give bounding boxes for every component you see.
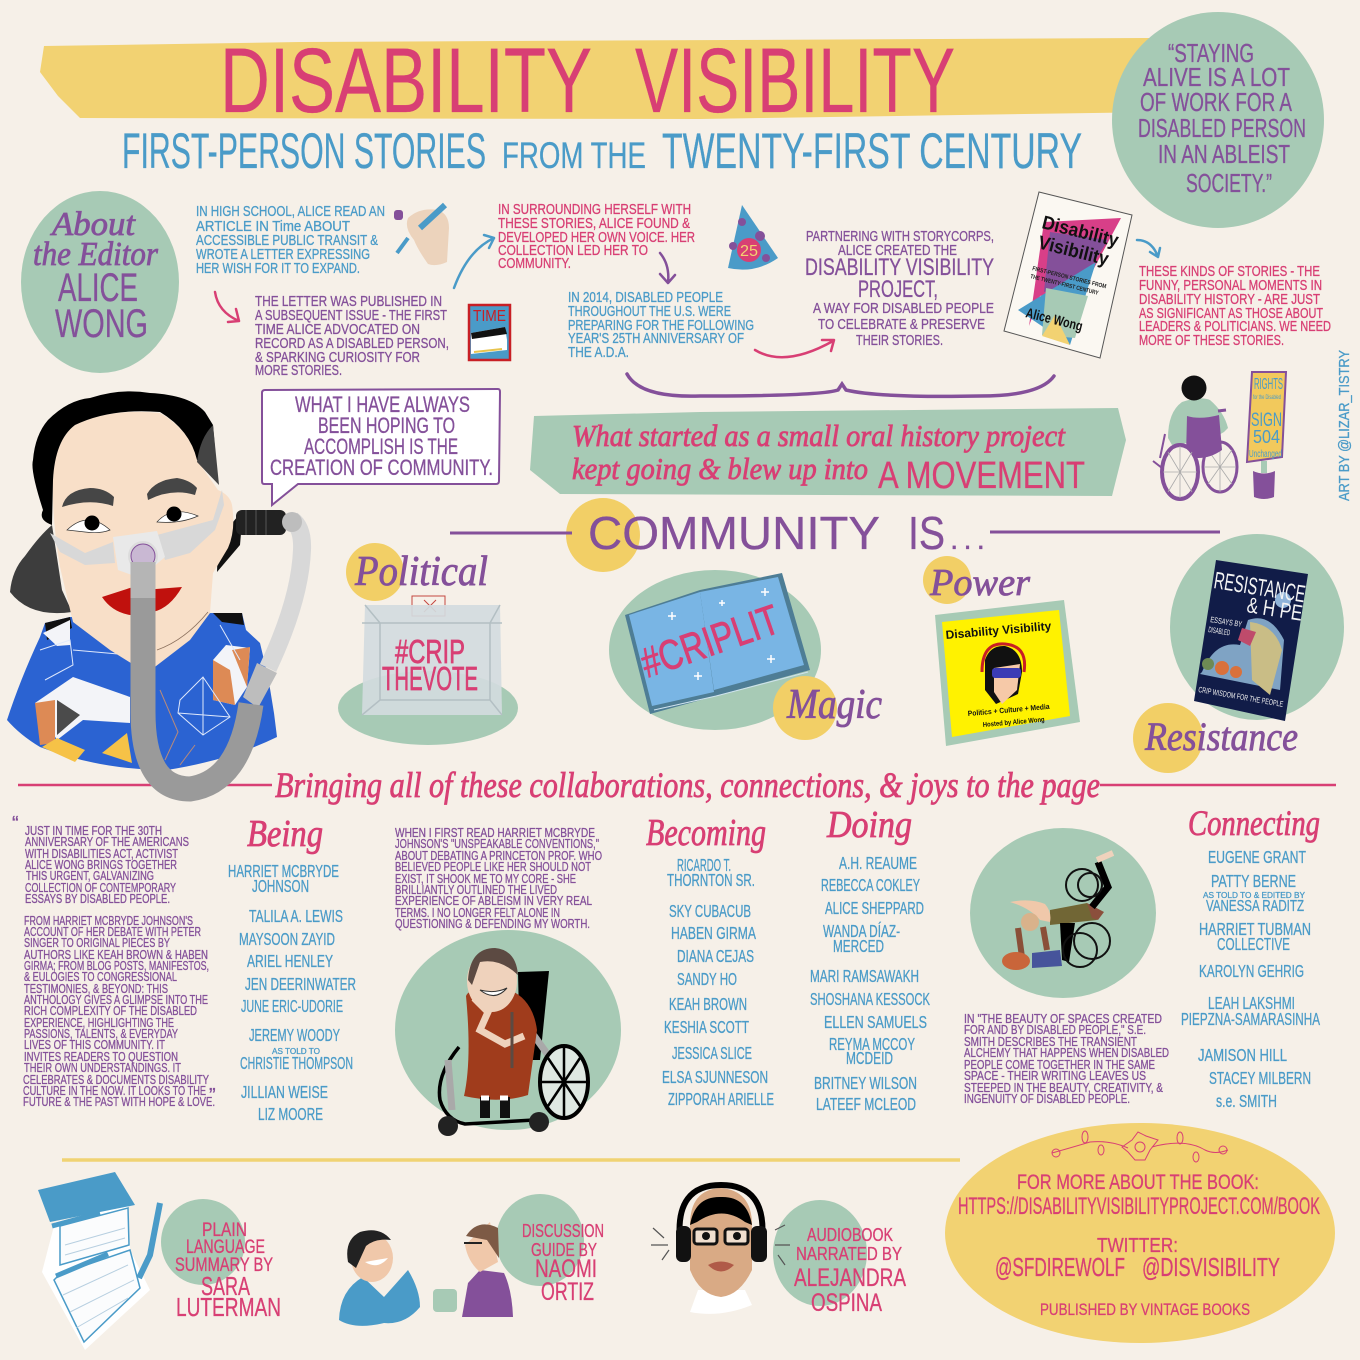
title	[220, 30, 955, 132]
discussion guide: DISCUSSION	[522, 1221, 604, 1241]
quote: Harriet McBryde Johnson essay: WHEN I FIRST READ HARRIET MCBRYDE	[395, 826, 595, 840]
resistance: book: CRIP WISDOM FOR THE PEOPLE	[1198, 685, 1284, 709]
quote: Harriet McBryde Johnson essay: JOHNSON'S "UNSPEAKABLE CONVENTIONS,"	[395, 837, 599, 851]
political: ballot box: Political	[354, 549, 488, 595]
speech bubble	[262, 389, 500, 505]
icon: party hat	[728, 205, 778, 270]
book description: JUST IN TIME FOR THE 30TH	[25, 824, 162, 838]
quote: Harriet McBryde Johnson essay: ABOUT DEBATING A PRINCETON PROF. WHO	[395, 849, 602, 863]
plain language summary	[38, 1172, 281, 1350]
wheelchair activist with sign	[1153, 372, 1286, 499]
story block: 2014: PREPARING FOR THE FOLLOWING	[568, 318, 754, 334]
column: connecting: Connecting	[1188, 803, 1320, 843]
icon: time magazine cover	[469, 305, 510, 360]
icon: hand writing	[394, 205, 449, 265]
movement banner	[530, 408, 1126, 497]
quote circle: “STAYING	[1168, 38, 1254, 68]
story block: surrounding herself: COMMUNITY.	[498, 256, 571, 272]
story block: high school letter: ARTICLE IN Time ABOUT	[196, 219, 350, 235]
power: podcast poster: Hosted by Alice Wong	[983, 717, 1045, 729]
illustration: Harriet in wheelchair	[395, 930, 621, 1136]
discussion guide	[339, 1194, 604, 1326]
book description: INVITES READERS TO QUESTION	[24, 1050, 178, 1064]
column: being: JEN DEERINWATER	[245, 974, 356, 994]
column: becoming: DIANA CEJAS	[677, 946, 754, 966]
book description: AUTHORS LIKE KEAH BROWN & HABEN	[24, 948, 208, 962]
book description: ACCOUNT OF HER DEBATE WITH PETER	[24, 925, 201, 939]
portrait: Alice Wong	[7, 391, 302, 770]
text: beauty of spaces: ALCHEMY THAT HAPPENS WHEN DISABLED	[964, 1046, 1169, 1060]
story block: these kinds of stories	[1139, 264, 1331, 349]
plain language summary: SARA	[201, 1271, 250, 1301]
quote: Harriet McBryde Johnson essay	[395, 826, 602, 931]
text: beauty of spaces: FOR AND BY DISABLED PEOPLE," S.E.	[964, 1023, 1146, 1037]
book description: ALICE WONG BRINGS TOGETHER	[25, 858, 177, 872]
audiobook: OSPINA	[811, 1289, 882, 1317]
arrow: to project	[755, 340, 834, 357]
column: becoming: ELSA SJUNNESON	[662, 1067, 768, 1087]
text: beauty of spaces: SMITH DESCRIBES THE TRANSIENT	[964, 1035, 1137, 1049]
book description: “	[12, 813, 19, 835]
story block: letter published: THE LETTER WAS PUBLISHED IN	[255, 294, 442, 310]
column: doing: A.H. REAUME	[839, 853, 917, 873]
story block: 2014: THE A.D.A.	[568, 345, 629, 361]
plain language summary: LANGUAGE	[186, 1237, 265, 1258]
arrow: down to 2014	[660, 253, 675, 283]
column: doing	[810, 804, 930, 1114]
column: doing: REBECCA COKLEY	[821, 875, 920, 895]
story block: storycorps	[805, 229, 994, 349]
political: ballot box	[338, 543, 518, 745]
column: doing: BRITNEY WILSON	[814, 1073, 917, 1093]
column: doing: LATEEF MCLEOD	[816, 1094, 916, 1114]
art credit: ART BY @LIZAR_TISTRY	[1336, 350, 1353, 501]
quote: Harriet McBryde Johnson essay: TERMS. I NO LONGER FELT ALONE IN	[395, 906, 560, 920]
column: becoming: ZIPPORAH ARIELLE	[668, 1089, 774, 1109]
story block: high school letter	[196, 204, 385, 277]
more info oval: TWITTER:	[1097, 1235, 1178, 1257]
heading: community is: IS	[908, 507, 945, 559]
more info oval: PUBLISHED BY VINTAGE BOOKS	[1040, 1300, 1250, 1319]
book description: TESTIMONIES, & BEYOND: THIS	[24, 982, 168, 996]
more info oval: @DISVISIBILITY	[1142, 1252, 1280, 1282]
heading: community is: ...	[950, 523, 985, 556]
column: being: MAYSOON ZAYID	[239, 929, 335, 949]
plain language summary: LUTERMAN	[176, 1292, 281, 1322]
wheelchair activist with sign: 504	[1253, 427, 1280, 447]
column: connecting: PATTY BERNE	[1211, 871, 1296, 891]
quote: Harriet McBryde Johnson essay: QUESTIONING & DEFENDING MY WORTH.	[395, 917, 590, 931]
text: beauty of spaces: IN "THE BEAUTY OF SPACES CREATED	[964, 1012, 1162, 1026]
book description: EXPERIENCE, HIGHLIGHTING THE	[24, 1016, 174, 1030]
brace	[627, 374, 1054, 396]
story block: letter published: TIME ALICE ADVOCATED ON	[255, 322, 420, 338]
column: becoming: KESHIA SCOTT	[664, 1017, 749, 1037]
quote circle: SOCIETY.”	[1186, 168, 1272, 198]
resistance: book: ESSAYS BY	[1210, 615, 1243, 629]
column: doing: Doing	[826, 804, 912, 846]
section heading: bringing all: Bringing all of these collaborations, connections, & joys to the page	[275, 765, 1100, 805]
book cover: disability visibility: Visibility	[1036, 232, 1111, 270]
arrow: to closing thought	[1137, 240, 1160, 257]
column: connecting: EUGENE GRANT	[1208, 847, 1306, 867]
column: becoming: SKY CUBACUB	[669, 901, 751, 921]
column: connecting: HARRIET TUBMAN	[1199, 919, 1311, 939]
title: VISIBILITY	[635, 30, 955, 132]
about the editor badge: WONG	[55, 302, 148, 346]
book description: ANTHOLOGY GIVES A GLIMPSE INTO THE	[24, 993, 208, 1007]
column: doing: WANDA DÍAZ-	[823, 921, 900, 941]
discussion guide: NAOMI	[535, 1255, 597, 1283]
speech bubble: BEEN HOPING TO	[318, 413, 455, 438]
audiobook	[651, 1185, 906, 1317]
magic: open book: #CRIPLIT	[635, 596, 785, 687]
heading: community is: COMMUNITY	[588, 507, 880, 559]
title banner: yellow brush stroke	[40, 38, 1158, 119]
heading: community is	[450, 498, 1220, 572]
story block: storycorps: ALICE CREATED THE	[838, 243, 957, 259]
speech bubble: WHAT I HAVE ALWAYS	[295, 392, 470, 417]
power: podcast poster: Politics + Culture + Media	[967, 702, 1051, 718]
quote: Harriet McBryde Johnson essay: BELIEVED PEOPLE LIKE HER SHOULD NOT	[395, 860, 591, 874]
story block: letter published: A SUBSEQUENT ISSUE - THE FIRST	[255, 308, 447, 324]
column: being	[228, 813, 356, 1124]
subtitle: FROM THE	[502, 135, 646, 176]
column: connecting: JAMISON HILL	[1198, 1045, 1287, 1065]
column: doing: SHOSHANA KESSOCK	[810, 989, 930, 1009]
column: being: JEREMY WOODY	[249, 1025, 340, 1045]
story block: storycorps: THEIR STORIES.	[856, 333, 943, 349]
about the editor badge	[21, 191, 179, 373]
story block: high school letter: HER WISH FOR IT TO EXPAND.	[196, 261, 360, 277]
book description: GIRMA; FROM BLOG POSTS, MANIFESTOS,	[24, 959, 209, 973]
story block: letter published	[255, 294, 449, 379]
column: doing: ALICE SHEPPARD	[825, 898, 924, 918]
column: becoming: HABEN GIRMA	[671, 923, 756, 943]
magic: open book: Magic	[786, 682, 882, 728]
book cover: disability visibility: Alice Wong	[1024, 304, 1084, 334]
resistance: book: DISABLED	[1208, 625, 1231, 637]
story block: storycorps: PROJECT,	[858, 276, 938, 303]
wheelchair activist with sign: for the Disabled	[1253, 395, 1281, 401]
icon: party hat: 25	[740, 243, 758, 260]
plain language summary: PLAIN	[202, 1220, 247, 1241]
power: podcast poster: Power	[929, 562, 1030, 604]
power: podcast poster: Disability Visibility	[945, 619, 1052, 642]
quote circle: IN AN ABLEIST	[1158, 139, 1290, 169]
political: ballot box: THEVOTE	[382, 660, 478, 697]
book description: THEIR OWN UNDERSTANDINGS. IT	[24, 1061, 181, 1075]
text: beauty of spaces: SPACE - THEIR WRITING LEAVES US	[964, 1069, 1146, 1083]
column: being: Being	[247, 813, 323, 855]
book description: WITH DISABILITIES ACT, ACTIVIST	[25, 847, 178, 861]
book description: LIVES OF THIS COMMUNITY. IT	[24, 1038, 165, 1052]
story block: surrounding herself	[498, 202, 695, 272]
book description: CULTURE IN THE NOW. IT LOOKS TO THE	[23, 1084, 206, 1098]
column: connecting: COLLECTIVE	[1217, 934, 1290, 954]
story block: 2014: IN 2014, DISABLED PEOPLE	[568, 290, 723, 306]
subtitle: FIRST-PERSON STORIES	[122, 123, 486, 179]
column: becoming	[646, 812, 774, 1109]
story block: storycorps: PARTNERING WITH STORYCORPS,	[806, 229, 994, 245]
story block: surrounding herself: DEVELOPED HER OWN VOICE. HER	[498, 230, 695, 246]
column: being: JILLIAN WEISE	[241, 1082, 328, 1102]
book description	[12, 813, 216, 1109]
discussion guide: GUIDE BY	[531, 1240, 597, 1260]
story block: storycorps: A WAY FOR DISABLED PEOPLE	[813, 301, 994, 317]
wheelchair activist with sign: RIGHTS	[1254, 376, 1283, 393]
quote circle	[1112, 12, 1324, 228]
plain language summary: SUMMARY BY	[175, 1255, 273, 1276]
about the editor badge: ALICE	[58, 266, 138, 310]
quote circle: ALIVE IS A LOT	[1143, 62, 1290, 92]
book description: ESSAYS BY DISABLED PEOPLE.	[25, 892, 170, 906]
quote: Harriet McBryde Johnson essay: BRILLIANTLY OUTLINED THE LIVED	[395, 883, 557, 897]
story block: letter published: RECORD AS A DISABLED PERSON,	[255, 336, 449, 352]
column: doing: ELLEN SAMUELS	[824, 1012, 927, 1032]
column: connecting: STACEY MILBERN	[1209, 1068, 1311, 1088]
political: ballot box: #CRIP	[395, 633, 465, 670]
eyes and brows	[62, 478, 198, 533]
subtitle	[122, 123, 1082, 179]
column: being: ARIEL HENLEY	[247, 951, 333, 971]
text: beauty of spaces: PEOPLE COME TOGETHER IN THE SAME	[964, 1058, 1155, 1072]
speech bubble: ACCOMPLISH IS THE	[304, 434, 458, 459]
power: podcast poster	[923, 556, 1080, 746]
about the editor badge: About	[50, 206, 137, 243]
book description: ”	[209, 1085, 216, 1107]
column: becoming: SANDY HO	[677, 969, 737, 989]
column: being: TALILA A. LEWIS	[249, 906, 343, 926]
discussion guide: ORTIZ	[541, 1278, 594, 1306]
story block: high school letter: WROTE A LETTER EXPRESSING	[196, 247, 370, 263]
book description: FROM HARRIET MCBRYDE JOHNSON'S	[24, 914, 193, 928]
story block: high school letter: ACCESSIBLE PUBLIC TRANSIT &	[196, 233, 378, 249]
story block: letter published: MORE STORIES.	[255, 363, 342, 379]
quote circle: OF WORK FOR A	[1140, 87, 1292, 117]
book description: CELEBRATES & DOCUMENTS DISABILITY	[23, 1073, 209, 1087]
column: connecting: s.e. SMITH	[1216, 1091, 1277, 1111]
column: being: LIZ MOORE	[258, 1104, 323, 1124]
story block: these kinds of stories: MORE OF THESE STORIES.	[1139, 333, 1284, 349]
icon: time magazine cover: TIME	[473, 308, 506, 325]
book cover: disability visibility: Disability	[1040, 212, 1121, 252]
movement banner: What started as a small oral history project	[572, 418, 1066, 453]
column: connecting	[1181, 803, 1320, 1111]
audiobook: NARRATED BY	[796, 1244, 902, 1264]
mask	[50, 490, 224, 578]
movement banner: A MOVEMENT	[878, 455, 1085, 497]
book description: SINGER TO ORIGINAL PIECES BY	[24, 936, 170, 950]
column: doing: MCDEID	[846, 1048, 893, 1068]
wheelchair activist with sign: Unchanged	[1249, 449, 1282, 460]
story block: letter published: & SPARKING CURIOSITY FOR	[255, 350, 420, 366]
column: connecting: AS TOLD TO & EDITED BY	[1203, 890, 1305, 900]
text: beauty of spaces: STEEPED IN THE BEAUTY, CREATIVITY, &	[964, 1081, 1164, 1095]
resistance: book: Resistance	[1144, 714, 1298, 759]
book description: THIS URGENT, GALVANIZING	[26, 869, 154, 883]
illustration: dancers	[970, 828, 1156, 998]
breathing tube	[143, 598, 251, 789]
story block: surrounding herself: IN SURROUNDING HERSELF WITH	[498, 202, 691, 218]
wheelchair activist with sign: SIGN	[1251, 410, 1282, 431]
story block: surrounding herself: COLLECTION LED HER TO	[498, 243, 648, 259]
column: being: CHRISTIE THOMPSON	[240, 1053, 353, 1073]
more info oval: FOR MORE ABOUT THE BOOK:	[1017, 1171, 1259, 1194]
magic: open book	[609, 570, 882, 740]
story block: these kinds of stories: DISABILITY HISTORY - ARE JUST	[1139, 292, 1320, 308]
column: being: JUNE ERIC-UDORIE	[241, 996, 343, 1016]
column: connecting: VANESSA RADITZ	[1206, 898, 1304, 915]
column: becoming: Becoming	[646, 812, 766, 854]
quote: Harriet McBryde Johnson essay: EXPERIENCE OF ABLEISM IN VERY REAL	[395, 894, 592, 908]
column: becoming: RICARDO T.	[677, 855, 731, 875]
shirt geometry	[35, 620, 250, 765]
column: becoming: KEAH BROWN	[669, 994, 747, 1014]
column: doing: REYMA MCCOY	[829, 1034, 915, 1054]
book description: RICH COMPLEXITY OF THE DISABLED	[24, 1004, 197, 1018]
book cover: disability visibility: FIRST-PERSON STORIES FROM	[1032, 266, 1107, 290]
subtitle: TWENTY-FIRST CENTURY	[662, 123, 1082, 179]
book description: ANNIVERSARY OF THE AMERICANS	[25, 835, 189, 849]
speech bubble: CREATION OF COMMUNITY.	[270, 455, 493, 480]
story block: 2014: YEAR'S 25TH ANNIVERSARY OF	[568, 331, 744, 347]
story block: storycorps: TO CELEBRATE & PRESERVE	[818, 317, 985, 333]
story block: surrounding herself: THESE STORIES, ALICE FOUND &	[498, 216, 690, 232]
column: being: HARRIET MCBRYDE	[228, 861, 339, 881]
column: connecting: LEAH LAKSHMI	[1208, 993, 1295, 1013]
resistance: book	[1133, 534, 1344, 773]
more info oval: @SFDIREWOLF	[995, 1252, 1125, 1282]
column: being: AS TOLD TO	[272, 1046, 320, 1056]
story block: 2014	[568, 290, 754, 361]
story block: storycorps: DISABILITY VISIBILITY	[805, 254, 994, 281]
story block: 2014: THROUGHOUT THE U.S. WERE	[568, 304, 731, 320]
column: becoming: THORNTON SR.	[667, 870, 755, 890]
column: doing: MERCED	[833, 936, 884, 956]
story block: high school letter: IN HIGH SCHOOL, ALICE READ AN	[196, 204, 385, 220]
book description: FUTURE & THE PAST WITH HOPE & LOVE.	[23, 1095, 215, 1109]
book description: COLLECTION OF CONTEMPORARY	[25, 881, 176, 895]
audiobook: ALEJANDRA	[794, 1264, 906, 1292]
quote: Harriet McBryde Johnson essay: EXIST, IT SHOOK ME TO MY CORE - SHE	[395, 872, 576, 886]
arrow: to letter	[215, 292, 239, 322]
column: connecting: KAROLYN GEHRIG	[1199, 961, 1304, 981]
arrow: to community	[454, 235, 494, 288]
audiobook: AUDIOBOOK	[807, 1225, 893, 1245]
text: beauty of spaces	[964, 1012, 1169, 1106]
column: being: JOHNSON	[252, 876, 309, 896]
movement banner: kept going & blew up into	[572, 451, 868, 486]
column: becoming: JESSICA SLICE	[672, 1043, 752, 1063]
column: doing: MARI RAMSAWAKH	[810, 966, 919, 986]
book cover: disability visibility: THE TWENTY-FIRST CENTURY	[1030, 274, 1099, 297]
about the editor badge: the Editor	[33, 236, 159, 273]
book description: & EULOGIES TO CONGRESSIONAL	[24, 970, 177, 984]
title: DISABILITY	[220, 30, 592, 132]
resistance: book: & H PE	[1245, 592, 1304, 626]
more info oval	[945, 1123, 1335, 1343]
book description: PASSIONS, TALENTS, & EVERYDAY	[24, 1027, 178, 1041]
book cover: disability visibility	[1004, 192, 1132, 358]
text: beauty of spaces: INGENUITY OF DISABLED PEOPLE.	[964, 1092, 1130, 1106]
